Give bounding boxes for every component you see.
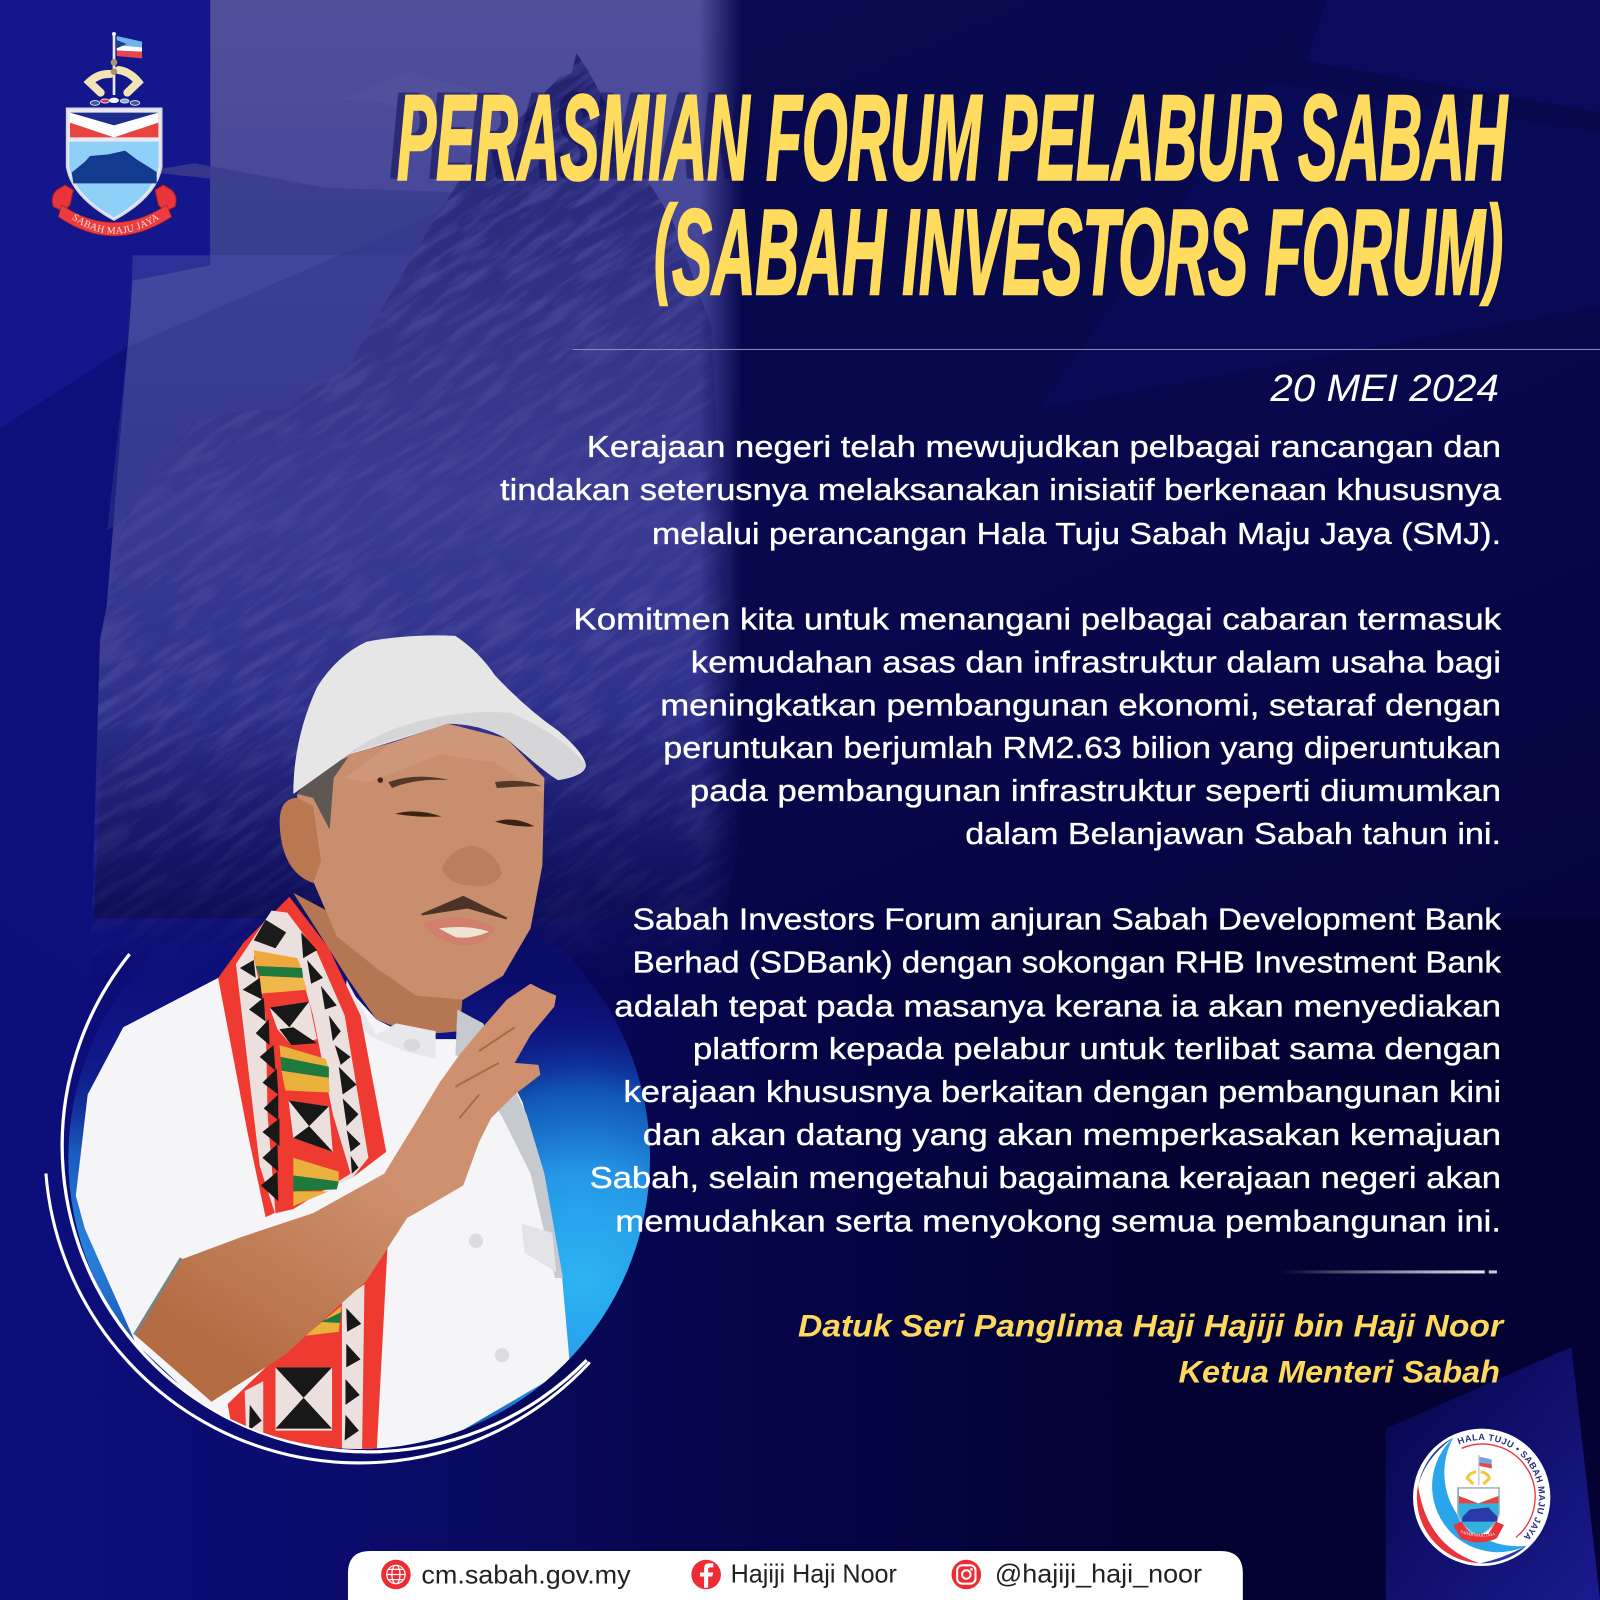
website: cm.sabah.gov.my (421, 1562, 631, 1590)
white shirt (76, 968, 570, 1454)
lower sash (228, 1248, 388, 1449)
body paragraph 1: tindakan seterusnya melaksanakan inisiatif berkenaan khususnya (500, 473, 1502, 507)
shield (67, 108, 162, 220)
body paragraph 2 (573, 603, 1502, 851)
divider (572, 349, 1600, 350)
body paragraph 2: pada pembangunan infrastruktur seperti diumumkan (690, 774, 1501, 808)
body paragraph 2: peruntukan berjumlah RM2.63 bilion yang diperuntukan (663, 731, 1501, 765)
Sabah coat of arms logo (52, 32, 177, 236)
title (397, 70, 1508, 320)
title: ) (1480, 185, 1503, 307)
body paragraph 3: adalah tepat pada masanya kerana ia akan menyediakan (614, 989, 1501, 1023)
body paragraph 3: Berhad (SDBank) dengan sokongan RHB Investment Bank (633, 945, 1502, 979)
hourglass patterns (270, 1002, 317, 1045)
flag and pole (112, 32, 142, 95)
white cap (293, 635, 586, 794)
mountain photo panel (92, 0, 738, 946)
facial features (378, 777, 542, 945)
mini crest: SABAH MAJU JAYA (1460, 1530, 1496, 1537)
portrait: man in white cap with red sash (76, 635, 586, 1454)
rings around portrait (46, 954, 590, 1463)
facebook: Hajiji Haji Noor (731, 1561, 897, 1589)
red sash (218, 897, 386, 1217)
date: 20 MEI 2024 (1269, 367, 1499, 409)
swooshes (1417, 1438, 1527, 1563)
signature: Ketua Menteri Sabah (1179, 1354, 1500, 1390)
scroll ribbon: SABAH MAJU JAYA (72, 214, 160, 234)
body paragraph 2: kemudahan asas dan infrastruktur dalam usaha bagi (691, 645, 1501, 679)
signature (798, 1308, 1505, 1390)
body paragraph 1: melalui perancangan Hala Tuju Sabah Maju Jaya (SMJ). (652, 517, 1501, 551)
body paragraph 2: dalam Belanjawan Sabah tahun ini. (965, 817, 1501, 851)
signature divider (1281, 1270, 1497, 1273)
stripe blocks (254, 950, 301, 968)
arms holding pole (89, 59, 138, 93)
body paragraph 1 (500, 430, 1502, 551)
scroll ribbon (52, 184, 177, 236)
right triangles (301, 932, 361, 1174)
ring text: HALA TUJU • SABAH MAJU JAYA (1457, 1434, 1546, 1540)
raised arm and hand (136, 984, 556, 1402)
blue circle behind portrait (68, 951, 650, 1448)
body paragraph 3: platform kepada pelabur untuk terlibat sama dengan (693, 1032, 1501, 1066)
body paragraph 3: Sabah Investors Forum anjuran Sabah Development Bank (633, 903, 1502, 937)
body paragraph 3 (590, 903, 1502, 1239)
row of bowls (90, 98, 140, 105)
footer contact bar (348, 1551, 1243, 1600)
body paragraph 3: Sabah, selain mengetahui bagaimana kerajaan negeri akan (590, 1161, 1501, 1195)
title: ( (654, 185, 677, 307)
instagram: @hajiji_haji_noor (995, 1561, 1203, 1589)
body paragraph 3: dan akan datang yang akan memperkasakan kemajuan (643, 1118, 1501, 1152)
body paragraph 2: meningkatkan pembangunan ekonomi, setaraf dengan (660, 688, 1501, 722)
signature: Datuk Seri Panglima Haji Hajiji bin Haji Noor (798, 1308, 1505, 1344)
Hala Tuju Sabah Maju Jaya badge (1413, 1428, 1550, 1566)
body paragraph 2: Komitmen kita untuk menangani pelbagai cabaran termasuk (573, 603, 1502, 637)
body paragraph 3: kerajaan khususnya berkaitan dengan pembangunan kini (623, 1075, 1501, 1109)
left triangles (240, 960, 279, 1201)
neck (293, 893, 463, 1035)
grey hair (297, 756, 349, 830)
face (297, 724, 544, 1000)
inner red arc (1462, 1444, 1535, 1537)
body paragraph 3: memudahkan serta menyokong semua pembangunan ini. (615, 1205, 1501, 1239)
sleeve edge (136, 1259, 183, 1336)
body paragraph 1: Kerajaan negeri telah mewujudkan pelbagai rancangan dan (587, 430, 1501, 464)
